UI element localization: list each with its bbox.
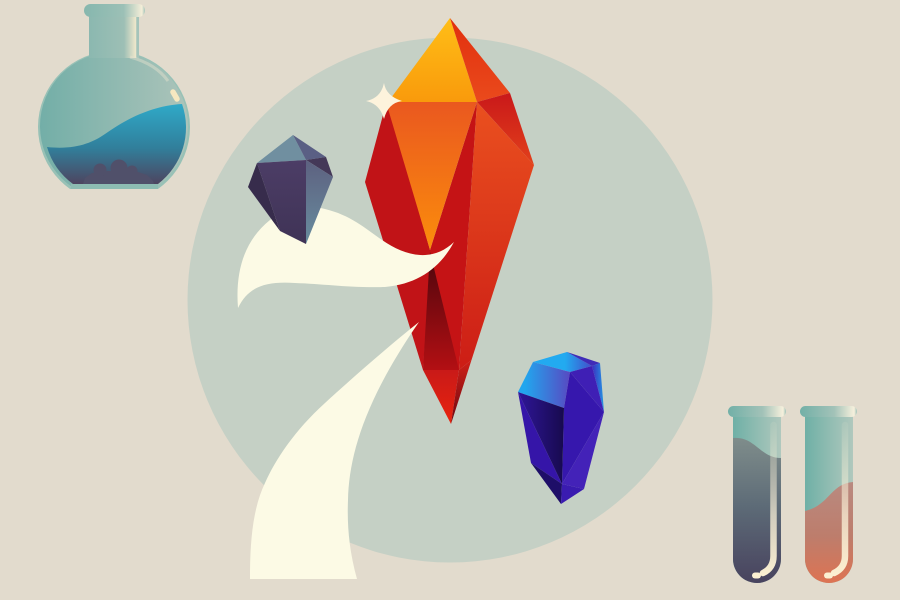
- tube liquid: [733, 438, 781, 590]
- test tube right: [800, 406, 857, 590]
- flask highlight dot: [173, 92, 177, 99]
- swoosh lower: [250, 322, 419, 579]
- tube lip: [800, 406, 857, 417]
- tube highlight: [763, 425, 774, 573]
- flask body highlight: [130, 57, 168, 81]
- tube lip: [728, 406, 786, 417]
- blue crystal right sliver: [592, 363, 604, 412]
- tube glass: [733, 412, 781, 583]
- flask rim: [38, 55, 190, 189]
- tube highlight: [834, 425, 845, 573]
- blue crystal top facet: [533, 352, 592, 372]
- blue crystal upper right facet: [570, 366, 604, 412]
- flask sediment: [83, 160, 154, 184]
- flask liquid: [47, 104, 186, 184]
- blue crystal bottom dark facet: [531, 463, 562, 504]
- crystal central orange facet: [386, 102, 477, 250]
- flask body: [40, 56, 188, 186]
- dark crystal: [248, 135, 333, 244]
- sparkle: [366, 83, 402, 119]
- blue crystal dark facet: [518, 392, 564, 484]
- blue crystal left top facet: [518, 362, 570, 408]
- blue crystal lower right facet: [562, 412, 604, 489]
- dark crystal top facet: [257, 135, 306, 163]
- crystal bottom shadow facet: [451, 360, 472, 424]
- dark crystal right dark facet: [306, 157, 333, 177]
- blue crystal: [518, 352, 604, 504]
- crystal bottom facet: [423, 370, 459, 424]
- blue crystal bottom facet: [561, 484, 584, 504]
- test tube left: [728, 406, 786, 590]
- tube highlight dot: [827, 572, 830, 578]
- flask lip: [84, 4, 145, 17]
- blue crystal top right facet: [567, 352, 600, 366]
- dark crystal top right facet: [293, 135, 326, 160]
- tube liquid: [805, 482, 853, 590]
- crystal right facet: [459, 102, 534, 370]
- crystal dark right facet: [477, 93, 534, 165]
- tube glass: [805, 412, 853, 583]
- red crystal: [365, 18, 534, 424]
- crystal left facet: [365, 100, 431, 370]
- tube highlight dot: [755, 572, 758, 578]
- flask: [38, 4, 190, 203]
- background circle: [188, 38, 712, 562]
- flask neck: [89, 12, 139, 58]
- dark crystal main facet: [257, 160, 306, 244]
- flask bottom band: [71, 184, 158, 189]
- dark crystal right facet: [306, 160, 333, 244]
- crystal dark shard: [423, 252, 459, 370]
- crystal top facet: [388, 18, 477, 102]
- swoosh upper: [237, 207, 454, 308]
- crystal inner red facet: [423, 102, 477, 370]
- blue crystal center facet: [562, 372, 604, 484]
- blue crystal left facet: [518, 392, 562, 484]
- crystal upper right facet: [450, 18, 510, 102]
- dark crystal left facet: [248, 163, 280, 231]
